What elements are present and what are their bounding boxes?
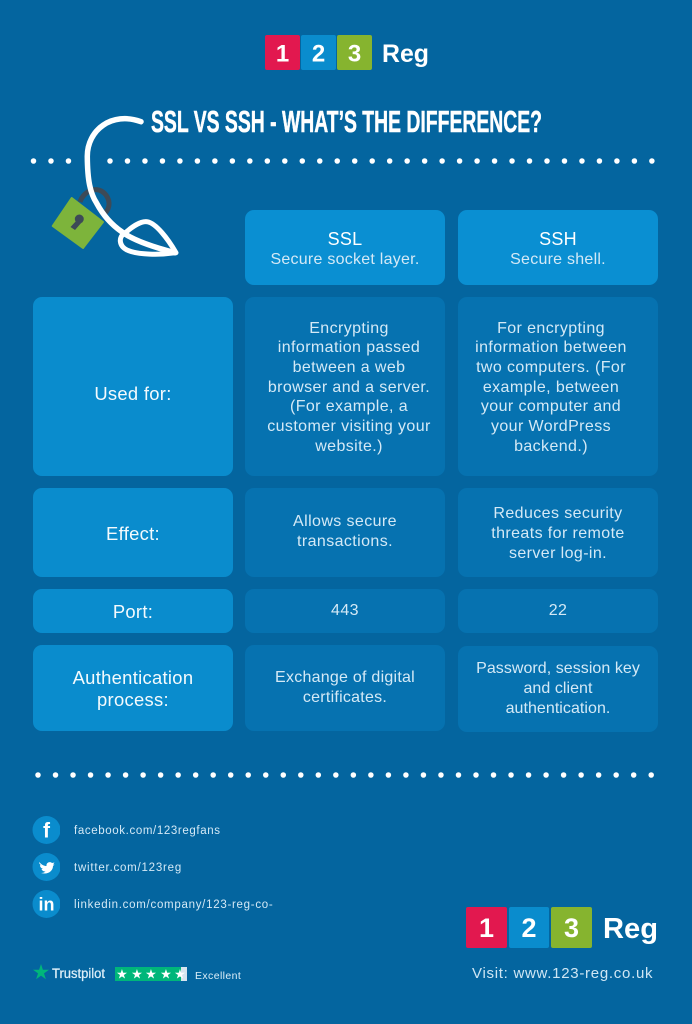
cell: SSL effect <box>245 488 445 577</box>
cell: SSL used for: information passed <box>278 339 420 356</box>
cell: SSH used for: example, between <box>483 379 619 396</box>
row label: port: Port: <box>113 601 153 622</box>
cell: SSH used for: information between <box>475 339 627 356</box>
logo: top 123 Reg: Reg <box>382 40 429 68</box>
cell: SSL effect: Allows secure <box>293 513 397 530</box>
cell: SSL port <box>245 589 445 633</box>
logo: bottom 123 Reg: Reg <box>603 913 658 945</box>
cell: SSL used for: (For example, a <box>290 398 408 415</box>
cell: SSH port: 22 <box>549 602 567 619</box>
logo: bottom 123 Reg: 3 <box>564 913 579 943</box>
logo: bottom 123 Reg: 2 <box>521 913 537 943</box>
cell: SSL used for: website.) <box>315 438 383 455</box>
cell: SSL used for: customer visiting your <box>267 418 431 435</box>
rating stars <box>115 967 187 982</box>
logo: top 123 Reg: 3 <box>348 40 361 68</box>
panel: SSL header <box>245 210 445 285</box>
row label: used for <box>33 297 233 476</box>
social: twitter <box>32 853 182 881</box>
cell: SSH effect: server log-in. <box>509 545 607 562</box>
rating stars: ★ <box>174 968 186 982</box>
rating stars: ★ <box>160 968 172 982</box>
cell: SSH used for: backend.) <box>514 438 588 455</box>
cell: SSL used for: browser and a server. <box>268 379 430 396</box>
trustpilot rating <box>33 964 241 982</box>
trustpilot rating: Excellent <box>195 970 241 982</box>
cell: SSL authentication: Exchange of digital <box>275 669 415 686</box>
cell: SSL authentication: certificates. <box>303 689 387 706</box>
cell: SSL port: 443 <box>331 602 359 619</box>
text: website link: Visit: www.123-reg.co.uk <box>472 965 653 982</box>
rating stars: ★ <box>116 968 128 982</box>
panel: SSH header: SSH <box>539 228 577 248</box>
cell: SSH used for: two computers. (For <box>476 359 626 376</box>
icon: twitter <box>32 853 60 881</box>
icon: padlock on a cable <box>52 116 178 257</box>
cell: SSH authentication: and client <box>523 680 592 697</box>
row label: authentication process: process: <box>97 689 169 710</box>
cell: SSH used for: your computer and <box>481 398 621 415</box>
row label: authentication process: Authentication <box>73 666 193 688</box>
rating stars: ★ <box>145 968 157 982</box>
icon: facebook <box>32 816 60 844</box>
cell: SSH effect: Reduces security <box>493 505 623 522</box>
social: linkedin <box>32 890 273 918</box>
row label: authentication process <box>33 645 233 731</box>
cell: SSH authentication <box>458 646 658 732</box>
panel: SSL header: SSL <box>328 228 362 248</box>
panel: SSL header: Secure socket layer. <box>270 251 420 268</box>
social: linkedin: linkedin.com/company/123-reg-co- <box>74 899 273 911</box>
icon: linkedin <box>32 890 60 918</box>
trustpilot rating: Trustpilot <box>52 966 105 981</box>
cell: SSH used for: For encrypting <box>497 320 605 337</box>
cell: SSL authentication <box>245 645 445 731</box>
panel: SSH header <box>458 210 658 285</box>
logo: bottom 123 Reg <box>466 907 658 948</box>
cell: SSL used for: between a web <box>293 359 405 376</box>
row label: port <box>33 589 233 633</box>
cell: SSL effect: transactions. <box>297 532 393 550</box>
logo: bottom 123 Reg: 1 <box>479 913 494 943</box>
icon: linkedin: in <box>38 894 54 914</box>
icon: facebook: f <box>43 820 51 842</box>
panel: SSH header: Secure shell. <box>510 251 606 268</box>
icon: padlock body <box>53 198 103 248</box>
cell: SSH used for <box>458 297 658 476</box>
logo: top 123 Reg <box>265 35 429 70</box>
cell: SSH authentication: authentication. <box>506 700 610 717</box>
icon: trustpilot star <box>33 964 49 979</box>
social: facebook <box>32 816 221 844</box>
row label: used for: Used for: <box>94 383 172 404</box>
logo: top 123 Reg: 1 <box>276 40 289 68</box>
cell: SSH used for: your WordPress <box>491 418 611 435</box>
row label: effect: Effect: <box>106 523 160 544</box>
icon: padlock shackle <box>80 190 109 216</box>
cell: SSL used for: Encrypting <box>309 320 389 337</box>
social: facebook: facebook.com/123regfans <box>74 825 221 837</box>
social: twitter: twitter.com/123reg <box>74 862 182 874</box>
icon: cable and plug <box>87 119 176 254</box>
cell: SSH port <box>458 589 658 633</box>
cell: SSH effect <box>458 488 658 577</box>
cell: SSH effect: threats for remote <box>491 525 625 542</box>
cell: SSH authentication: Password, session key <box>476 660 640 677</box>
logo: top 123 Reg: 2 <box>312 40 325 68</box>
row label: effect <box>33 488 233 577</box>
cell: SSL used for <box>245 297 445 476</box>
rating stars: ★ <box>131 968 143 982</box>
